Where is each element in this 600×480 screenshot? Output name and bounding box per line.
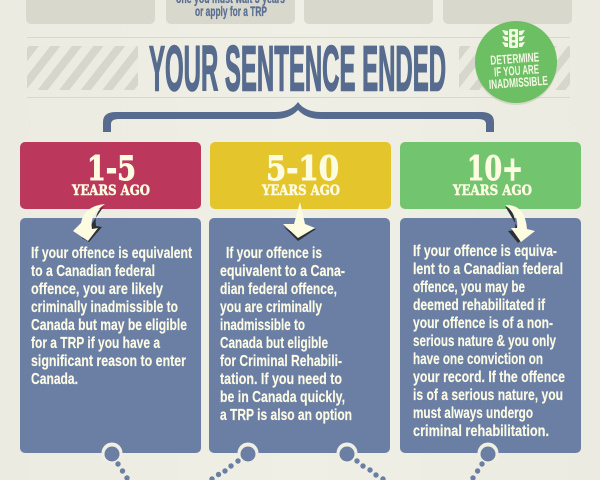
panel: 10+ years body	[400, 218, 581, 453]
panel: 1-5 years body	[20, 218, 201, 453]
panel: 5-10 years body: be in Canada quickly,	[220, 389, 345, 406]
panel: 5-10 years body: dian federal offence,	[220, 281, 337, 298]
panel: 5-10 years ago header: YEARS AGO	[261, 183, 340, 199]
badge: determine if you are inadmissible	[475, 21, 557, 105]
icon: traffic light	[502, 29, 525, 48]
panel: 10+ years ago header: YEARS AGO	[452, 183, 532, 199]
arrow: panel 2	[283, 202, 316, 241]
panel: 10+ years body: have one conviction on	[413, 351, 543, 368]
panel: 1-5 years ago header: 1-5	[87, 149, 136, 189]
connector: panel 1 dots	[102, 442, 130, 480]
panel: 5-10 years body	[209, 218, 390, 453]
panel: 10+ years body: deemed rehabilitated if	[413, 297, 546, 314]
badge text	[487, 49, 549, 92]
panel: 1-5 years body: If your offence is equivalent	[31, 245, 193, 262]
panel: 5-10 years ago header	[210, 142, 391, 209]
panel: 5-10 years body: a TRP is also an option	[220, 407, 352, 424]
panel: 10+ years body: your offence is of a non-	[413, 315, 553, 332]
panel: 5-10 years body: If your offence is	[226, 245, 322, 262]
connector: panel 2 left dots	[209, 442, 258, 480]
panel: 1-5 years body: to a Canadian federal	[31, 263, 155, 280]
top row of cards: or apply for a TRP	[195, 3, 267, 19]
panel: 1-5 years ago header	[20, 142, 201, 209]
panel: 5-10 years body: you are criminally	[220, 299, 322, 316]
connector: panel 2 right dots	[336, 442, 386, 480]
heading band: stripes and rules	[27, 37, 570, 98]
panel: 10+ years body: If your offence is equiva-	[413, 243, 557, 260]
panel: 1-5 years body: Canada.	[31, 371, 78, 388]
panel: 1-5 years body: significant reason to enter	[31, 353, 186, 370]
panel: 1-5 years ago header: YEARS AGO	[71, 183, 150, 199]
panel: 10+ years ago header: 10+	[467, 149, 523, 189]
panel: 1-5 years body: for a TRP if you have a	[31, 335, 160, 352]
badge text: DETERMINE	[490, 49, 540, 68]
badge text: IF YOU ARE	[494, 61, 540, 80]
panel: 5-10 years body: equivalent to a Cana-	[220, 263, 345, 280]
panel: 10+ years ago header	[400, 142, 581, 209]
panel: 10+ years body: offence, you may be	[413, 279, 525, 296]
top row of cards	[26, 0, 572, 24]
panel: 5-10 years body: inadmissible to	[220, 317, 305, 334]
panel: 1-5 years body: offence, you are likely	[31, 281, 163, 298]
connector: panel 3 dots	[470, 442, 498, 480]
panel: 5-10 years body: tation. If you need to	[220, 371, 342, 388]
panel: 1-5 years body: Canada but may be eligible	[31, 317, 187, 334]
panel: 5-10 years body: for Criminal Rehabili-	[220, 353, 342, 370]
panel: 1-5 years body: criminally inadmissible to	[31, 299, 178, 316]
panel: 10+ years body: must always undergo	[413, 405, 533, 422]
panel: 5-10 years ago header: 5-10	[266, 149, 339, 189]
panel: 10+ years body: criminal rehabilitation.	[413, 423, 549, 440]
panel: 5-10 years body: Canada but eligible	[220, 335, 328, 352]
arrow: panel 1	[73, 204, 105, 242]
arrow: panel 3	[505, 205, 535, 243]
brace	[103, 102, 494, 132]
badge text: INADMISSIBLE	[488, 73, 549, 92]
